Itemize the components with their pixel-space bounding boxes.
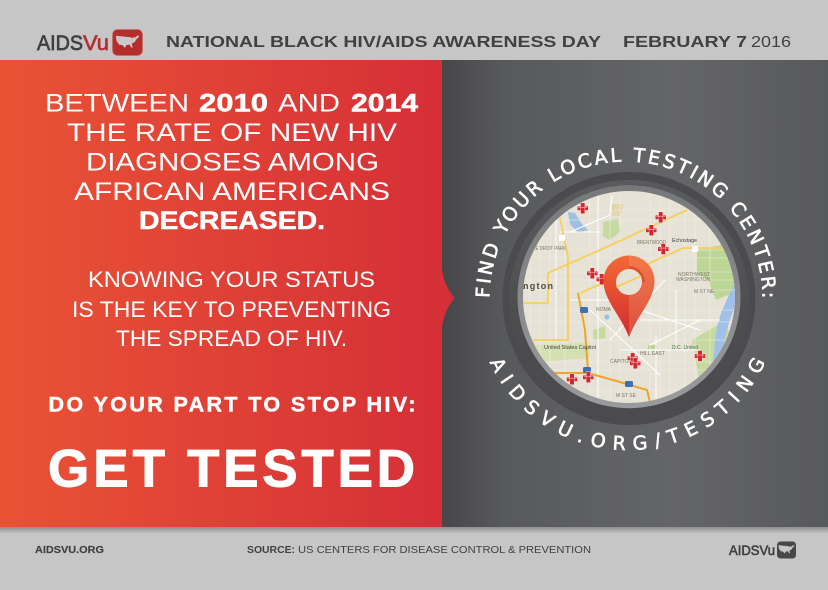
statistic text: 2014: [351, 90, 418, 118]
map labels: [523, 238, 715, 399]
map labels: LE DROIT PARK: [533, 246, 567, 252]
source line: SOURCE:: [247, 545, 295, 556]
footer logo: [729, 542, 796, 558]
statistic text: BETWEEN: [45, 90, 189, 118]
statistic text: 2010: [199, 90, 268, 118]
map labels: ngton: [523, 281, 553, 291]
event date: FEBRUARY 7: [623, 34, 747, 51]
status text: IS THE KEY TO PREVENTING: [72, 297, 391, 322]
status text: THE SPREAD OF HIV.: [116, 326, 347, 351]
map labels: NORTHWEST: [678, 272, 710, 278]
map labels: NOMA: [596, 307, 612, 313]
map labels: Echostage: [672, 238, 697, 244]
footer site link: AIDSVU.ORG: [35, 545, 104, 556]
footer: [35, 542, 796, 558]
map labels: BRENTWOOD: [637, 240, 666, 246]
map labels: M ST NE: [694, 289, 715, 295]
panel: red left: [0, 60, 454, 527]
statistic text: AND: [278, 90, 340, 118]
map test site markers: [566, 203, 706, 385]
source line: US CENTERS FOR DISEASE CONTROL & PREVENTION: [298, 545, 591, 556]
map labels: CAPITOL: [610, 359, 632, 365]
panel: dark right: [442, 60, 828, 527]
curved text: testing url: AIDSVU.ORG/TESTING: [489, 358, 764, 450]
map labels: M ST SE: [616, 393, 637, 399]
map labels: D.C. United: [672, 345, 698, 351]
statistic text: DECREASED.: [139, 207, 325, 235]
statistic text: DIAGNOSES AMONG: [86, 148, 379, 176]
map labels: United States Capitol: [544, 345, 596, 351]
get tested headline: [48, 440, 415, 498]
footer logo: AIDSVu: [729, 542, 775, 558]
map streets: [556, 195, 720, 400]
call to action: DO YOUR PART TO STOP HIV:: [48, 392, 416, 416]
status text: [72, 267, 391, 351]
map interstate shields: [559, 235, 698, 387]
map minor street grid: [520, 190, 740, 400]
AIDSVu logo: [37, 30, 142, 56]
status text: KNOWING YOUR STATUS: [88, 267, 375, 292]
statistic text: THE RATE OF NEW HIV: [67, 119, 397, 147]
event date: [623, 34, 791, 51]
outer map rings: [502, 172, 756, 425]
statistic text: AFRICAN AMERICANS: [74, 178, 390, 206]
map labels: WASHINGTON: [676, 277, 711, 283]
AIDSVu logo: Vu: [83, 32, 109, 55]
event date: 2016: [751, 34, 791, 51]
icon: map pin: [604, 256, 654, 337]
statistic text: [45, 90, 418, 235]
header bar: [0, 0, 828, 60]
map parks and water: [535, 204, 742, 388]
map: [520, 188, 742, 406]
curved text: find your local testing center: FIND YOUR LOCAL TESTING CENTER:: [475, 147, 776, 296]
map highways: [523, 210, 735, 340]
event title: NATIONAL BLACK HIV/AIDS AWARENESS DAY: [166, 34, 601, 51]
map labels: HILL EAST: [640, 351, 665, 357]
get tested headline: TESTED: [187, 440, 415, 498]
get tested headline: GET: [48, 440, 165, 498]
panel bottom shadow: [0, 527, 828, 534]
AIDSVu logo: AIDS: [37, 32, 83, 55]
